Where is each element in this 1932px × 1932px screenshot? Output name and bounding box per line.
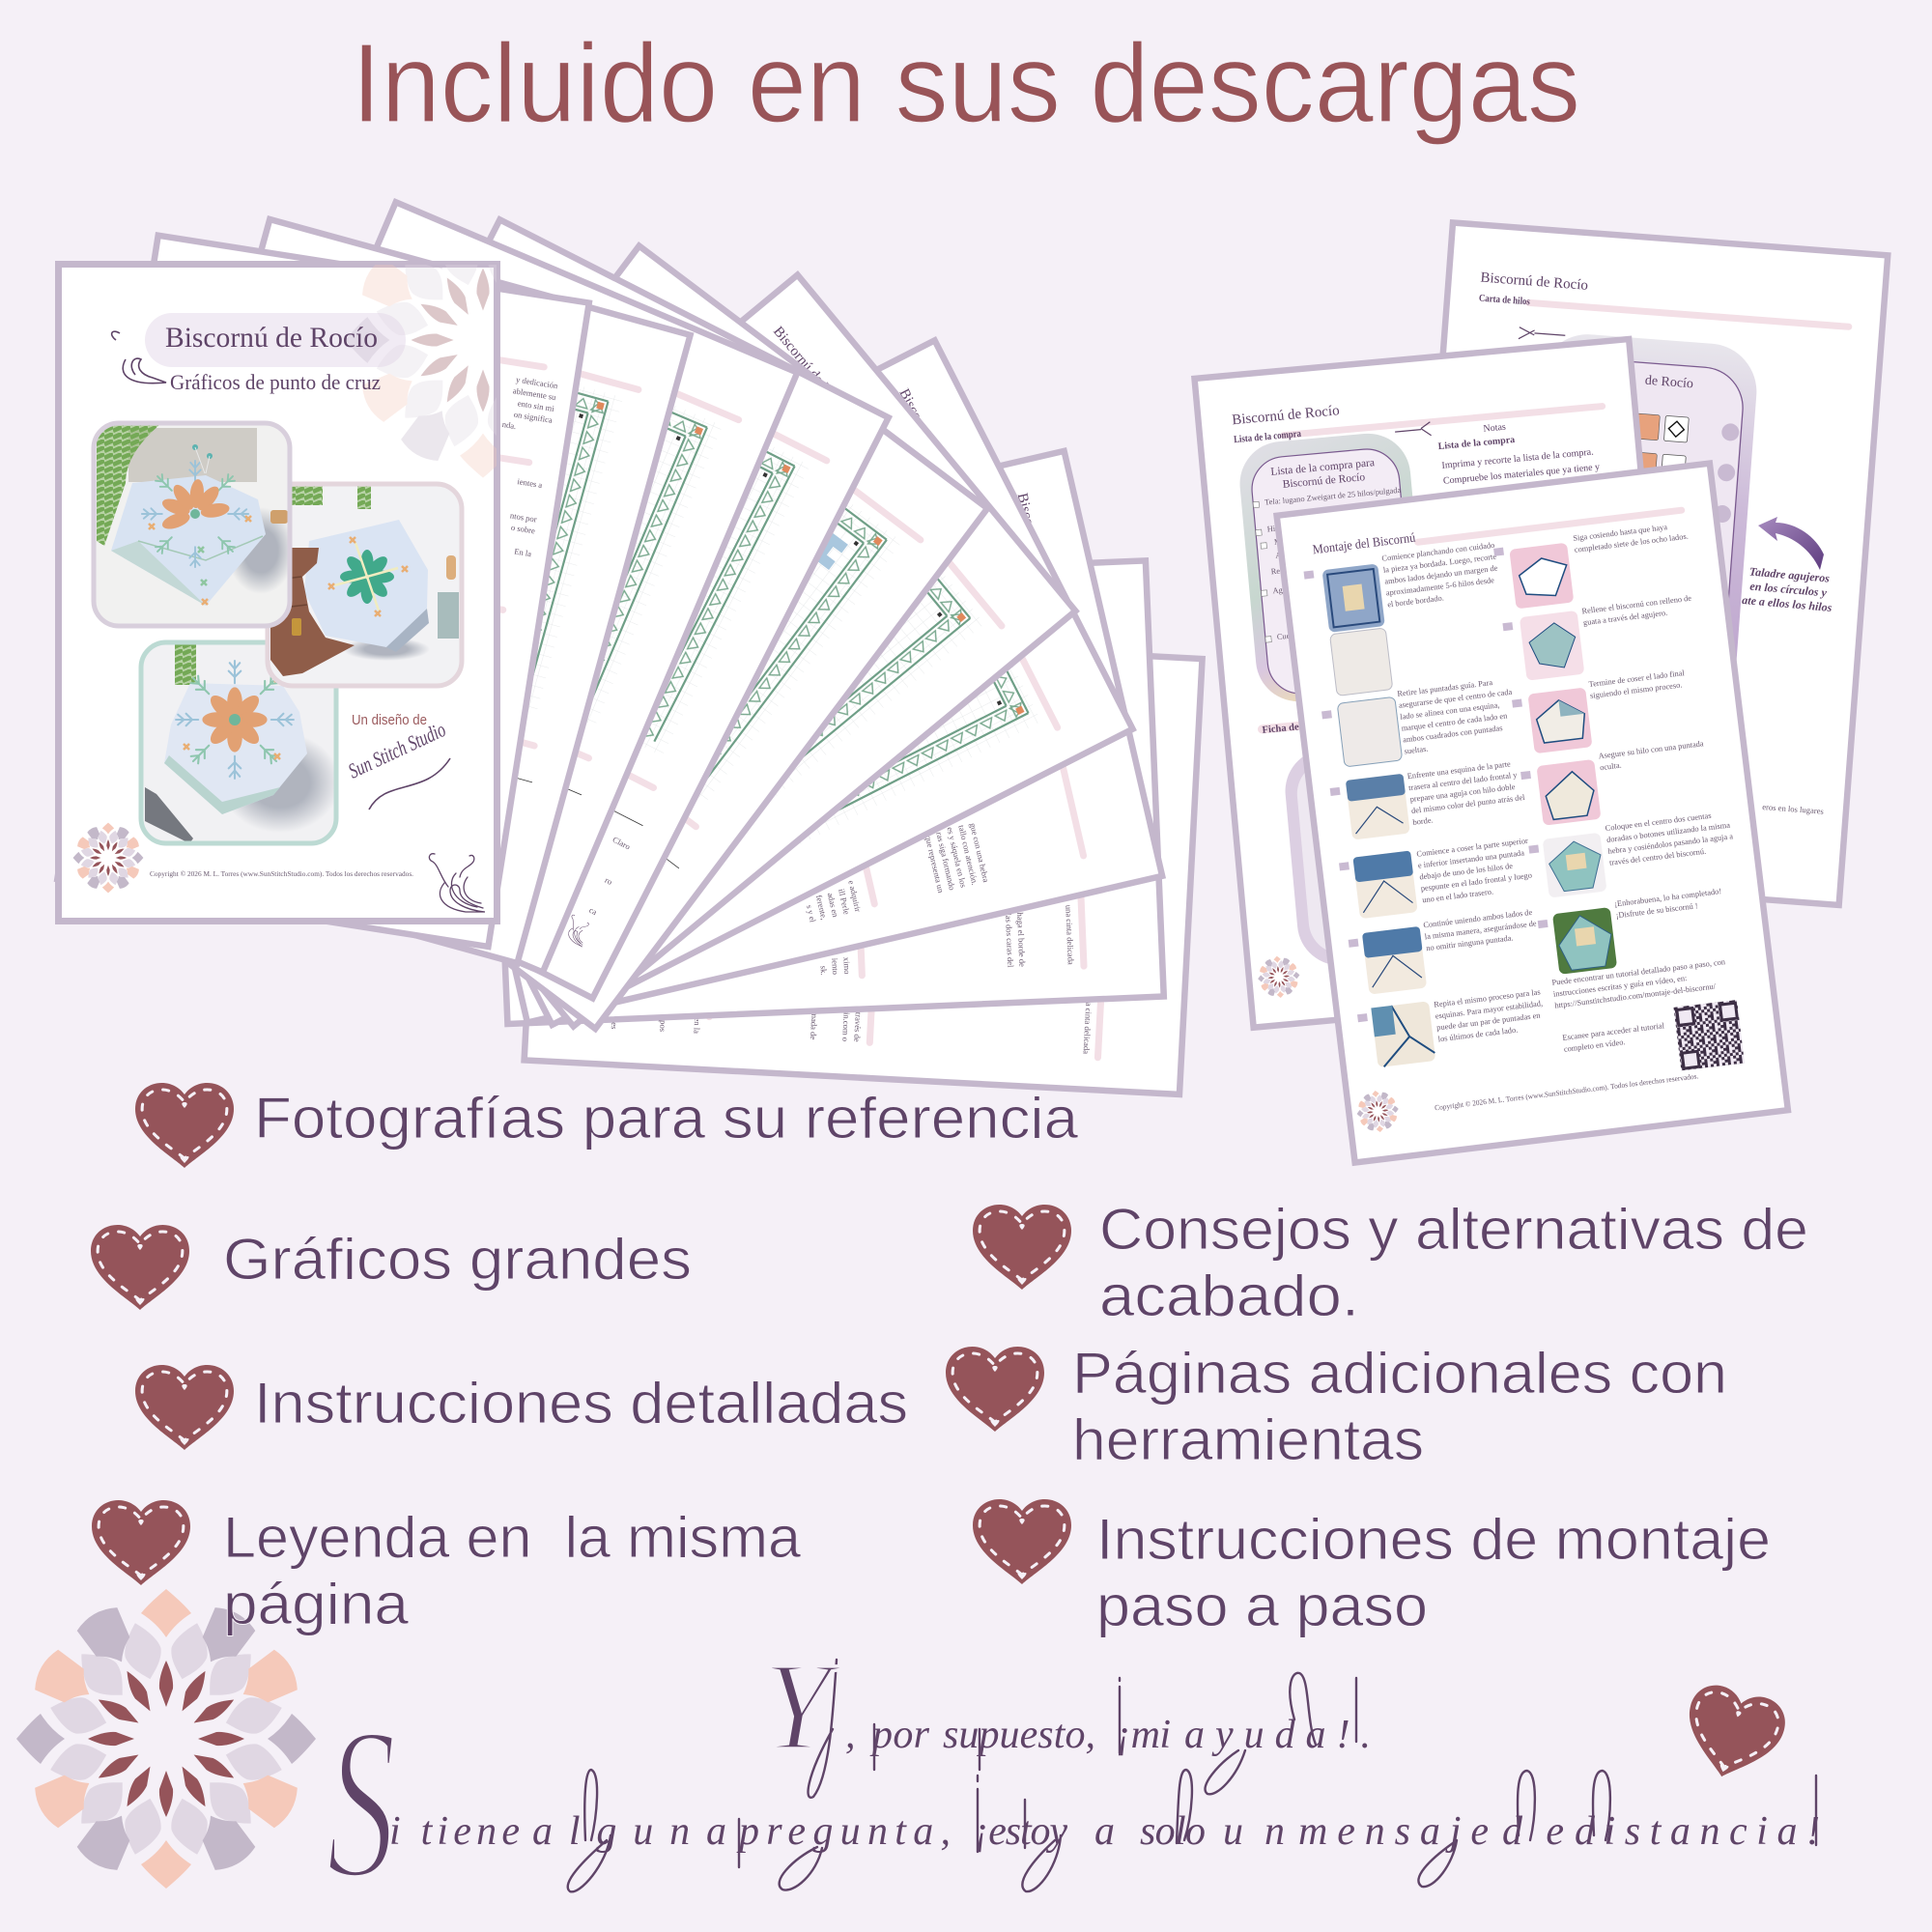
- page 4: chart page with legend and ornament: ro: [604, 875, 614, 887]
- heart bullet 7: [973, 1499, 1071, 1584]
- page 9: text page: ximo: [841, 957, 852, 975]
- signature: Sun Stitch Studio: [345, 717, 449, 783]
- step 2: lado se alinea con una esquina,: [1400, 700, 1500, 722]
- step 2: [1320, 676, 1519, 769]
- notes column: Notas: [1483, 422, 1506, 435]
- script line 2: solo: [1140, 1809, 1206, 1854]
- signature: [345, 717, 450, 810]
- script line 1: supuesto,: [943, 1713, 1095, 1757]
- title: Incluido en sus descargas: [352, 20, 1580, 146]
- shopping list card: Cuentas: [1276, 631, 1303, 641]
- shopping list card: Tela: lugano Zweigart de 25 hilos/pulgada: [1264, 486, 1402, 507]
- step 6: esquinas. Para mayor estabilidad,: [1435, 999, 1543, 1021]
- step 7: Siga cosiendo hasta que haya: [1573, 523, 1668, 543]
- step 11: doradas o botones utilizando la misma: [1606, 821, 1731, 844]
- heart bullet 6: [946, 1347, 1044, 1432]
- feature: legend on same page: página: [223, 1572, 410, 1636]
- pink divider: [1284, 407, 1603, 436]
- script line 2: distancia!: [1575, 1809, 1820, 1854]
- step 5: Continúe uniendo ambos lados de: [1423, 908, 1533, 929]
- step 10: oculta.: [1600, 761, 1622, 772]
- feature list: [91, 1083, 1808, 1638]
- step 9: siguiendo el mismo proceso.: [1590, 680, 1683, 700]
- feature: photographs: Fotografías para su referencia: [254, 1086, 1079, 1151]
- step 8: guata a través del agujero.: [1582, 609, 1668, 627]
- step 3: trasera al centro del lado frontal y: [1408, 771, 1519, 792]
- page 10: text page: epos: [658, 1016, 668, 1033]
- photo: biscornú with orange flower, upper: [94, 423, 295, 626]
- drill-hole note text: en los círculos y: [1749, 580, 1828, 600]
- step 6: puede dar un par de puntadas en: [1436, 1010, 1542, 1032]
- page 1: introduction text page: o sobre: [510, 523, 536, 535]
- script line 1: ,: [845, 1713, 856, 1757]
- shopping list card: Madejas: [1274, 535, 1302, 547]
- shopping list card: Rellenos: [1270, 565, 1299, 576]
- page 1: introduction text page: [57, 236, 589, 947]
- step 6: Repita el mismo proceso para las: [1434, 987, 1541, 1009]
- page 3: chart page: [141, 202, 797, 973]
- pink divider: [1418, 510, 1682, 542]
- sheet: assembly instructions: [1277, 464, 1788, 1162]
- shopping list card: Biscornú de Rocío: [1282, 471, 1366, 491]
- scissors: [1395, 422, 1432, 439]
- heading: Montaje del Biscornú: [1312, 530, 1416, 556]
- step 4: e inferior insertando una puntada: [1417, 848, 1525, 870]
- page 9: text page: haga el borde de: [1015, 912, 1027, 967]
- decorative mandala: [16, 1589, 316, 1889]
- step 6: [1356, 987, 1548, 1069]
- script line 2: mensaje: [1298, 1809, 1489, 1854]
- script line 2: i tiene: [389, 1809, 520, 1854]
- script line 1: ayuda!.: [1184, 1713, 1371, 1757]
- page 4: chart page with legend and ornament: [204, 219, 889, 998]
- page 8: text page: ferente,: [814, 894, 829, 921]
- page 1: introduction text page: y dedicación: [515, 375, 559, 390]
- step 1: Comience planchando con cuidado: [1381, 541, 1495, 563]
- step 4: debajo de uno de los hilos de: [1419, 862, 1514, 882]
- notes column: Compruebe los materiales que ya tiene y: [1442, 462, 1601, 487]
- script line 2: ¡estoy: [974, 1809, 1067, 1854]
- page 4: chart page with legend and ornament: Claro: [611, 835, 632, 851]
- page 1: introduction text page: o.: [486, 630, 494, 640]
- step 1: [1303, 541, 1511, 698]
- page 8: text page: e adquirir: [846, 879, 864, 913]
- feature: additional tool pages: herramientas: [1072, 1407, 1424, 1472]
- thread card panel: [1513, 331, 1760, 752]
- script line 2: de: [1502, 1809, 1564, 1854]
- page 10: text page: una cinta delicada: [1082, 994, 1094, 1055]
- notes column: Lista de la compra: [1437, 435, 1516, 452]
- page 1: introduction text page: ntos por: [509, 510, 538, 525]
- feature: step-by-step assembly: paso a paso: [1096, 1574, 1428, 1638]
- feature: tips and finishing alternatives: acabado.: [1099, 1264, 1359, 1328]
- tutorial link text: Escanee para acceder al tutorial: [1562, 1021, 1665, 1042]
- step 4: pespunte en el lado frontal y luego: [1420, 871, 1532, 893]
- shopping list card: Hilos DMC: [1266, 522, 1306, 533]
- heart bullet 1: [135, 1083, 234, 1168]
- page 8: text page: es y sáquela en los: [945, 826, 969, 889]
- heart bullet 5: [973, 1205, 1071, 1290]
- cover title pill: [145, 313, 406, 367]
- step 4: uno en el lado trasero.: [1422, 887, 1493, 904]
- step 12: ¡Disfrute de su biscornú !: [1615, 901, 1698, 920]
- drill-hole note text: ate a ellos los hilos: [1742, 593, 1833, 614]
- cover page: [55, 261, 500, 924]
- step 3: del mismo color del punto atrás del: [1411, 793, 1526, 815]
- closing message: [327, 1637, 1820, 1923]
- tutorial link text: https://Sunstitchstudio.com/montaje-del-biscornu/: [1554, 981, 1717, 1010]
- script line 1: por: [869, 1713, 930, 1757]
- shopping list card: Agujas: [1272, 584, 1296, 595]
- page ornament: [1726, 840, 1764, 879]
- step 1: la pieza ya bordada. Luego, recorte: [1382, 553, 1497, 575]
- step 2: sueltas.: [1404, 745, 1429, 755]
- fan of chart and instruction pages: [57, 202, 1203, 1094]
- step 12: ¡Enhorabuena, lo ha completado!: [1614, 887, 1722, 908]
- heart accent: [1675, 1680, 1791, 1789]
- step 5: [1347, 907, 1543, 996]
- project card: [1282, 738, 1464, 969]
- step 3: [1329, 758, 1528, 842]
- step 11: Coloque en el centro dos cuentas: [1605, 811, 1712, 833]
- step 7: [1492, 521, 1694, 611]
- script line 2: un: [1223, 1809, 1285, 1854]
- subheading: Lista de la compra: [1234, 429, 1302, 445]
- cover title: Biscornú de Rocío: [165, 322, 378, 354]
- heart bullet 4: [92, 1500, 190, 1585]
- cover flourish: [112, 331, 166, 384]
- page 8: text page: adas en: [826, 892, 840, 919]
- page 1: introduction text page: ientes a: [517, 476, 543, 490]
- page 8: text page: ill Perle: [837, 888, 852, 916]
- feature: detailed instructions: Instrucciones detalladas: [254, 1371, 908, 1435]
- page 8: text page: s y el: [805, 904, 818, 923]
- sheet: thread card: [1404, 222, 1888, 905]
- heading: Biscornú de Rocío: [1480, 270, 1588, 294]
- page 6: chart page: [296, 275, 1075, 1026]
- heart bullet 2: [91, 1225, 189, 1310]
- page 10: text page: [525, 625, 1203, 1094]
- shopping list card: Aguja: [1275, 550, 1295, 560]
- page 10: text page: in.com o: [840, 1012, 852, 1041]
- page 7: chart page: Biscornú de Rocío: [895, 386, 958, 490]
- page 9: text page: iento: [830, 958, 840, 975]
- script line 2: S: [327, 1682, 396, 1923]
- page 5: chart page: [247, 246, 987, 1029]
- sheet: shopping list: [1195, 339, 1688, 1028]
- cover spiral ornament: [429, 854, 485, 912]
- step 2: Retire las puntadas guía. Para: [1397, 678, 1493, 698]
- page 1: introduction text page: o: [487, 641, 492, 652]
- step 9: Termine de coser el lado final: [1588, 668, 1686, 689]
- step 3: prepare una aguja con hilo doble: [1409, 782, 1516, 804]
- thread card panel: de Rocío: [1644, 374, 1693, 391]
- step 9: [1511, 668, 1692, 755]
- page 1: introduction text page: nda.: [501, 419, 517, 431]
- tutorial link text: Puede encontrar un tutorial detallado paso a paso, con: [1551, 957, 1726, 987]
- step 10: [1520, 739, 1711, 828]
- page 8: text page: lo que representa un: [922, 826, 946, 895]
- step 11: [1527, 809, 1738, 899]
- step 8: Rellene el biscornú con relleno de: [1581, 594, 1692, 615]
- step 3: Enfrente una esquina de la parte: [1406, 759, 1511, 781]
- page 9: text page: sk.: [819, 965, 829, 976]
- lower panel heading: Ficha de proyecto: [1262, 719, 1339, 736]
- feature: tips and finishing alternatives: Consejos y alternativas de: [1099, 1197, 1808, 1262]
- scissors: [1519, 327, 1566, 342]
- step 1: el borde bordado.: [1387, 593, 1444, 609]
- step 1: ambos lados dejando un margen de: [1384, 564, 1498, 586]
- cover watermark mandala: [346, 265, 497, 477]
- script line 1: ¡mi: [1116, 1713, 1171, 1757]
- step 2: ambos cuadrados con puntadas: [1403, 724, 1503, 745]
- notes column: Imprima y recorte la lista de la compra.: [1441, 447, 1594, 471]
- step 2: asegurarse de que el centro de cada: [1398, 688, 1513, 710]
- step 5: la misma manera, asegurándose de: [1424, 919, 1537, 941]
- page 8: text page: Biscornú de Rocío: [1014, 492, 1053, 600]
- page 9: text page: una cinta delicada: [1064, 905, 1076, 965]
- page 9: text page: las dos caras del: [1004, 913, 1015, 968]
- page 10: text page: en la: [692, 1017, 702, 1034]
- photo: biscornú with green flower held in hand: [268, 484, 462, 686]
- heart bullet 3: [135, 1365, 234, 1450]
- page 6: chart page: Biscornú de Rocío: [770, 324, 851, 416]
- tutorial link text: instrucciones escritas y guía en vídeo, en:: [1552, 974, 1688, 999]
- page 2: chart page: [97, 219, 691, 963]
- cover subtitle: Gráficos de punto de cruz: [170, 370, 381, 394]
- script line 1: Y: [763, 1637, 841, 1776]
- page 1: introduction text page: la: [488, 618, 496, 629]
- step 10: Asegure su hilo con una puntada: [1598, 739, 1704, 760]
- QR code: [1674, 1000, 1745, 1070]
- feature: legend on same page: Leyenda en la misma: [223, 1505, 802, 1570]
- step 5: no omitir ninguna puntada.: [1426, 933, 1514, 952]
- step 12: [1536, 887, 1729, 977]
- step 4: [1339, 837, 1535, 921]
- step 2: marque el centro de cada lado en: [1401, 711, 1509, 733]
- step 8: [1502, 594, 1699, 683]
- shopping list card: [1236, 430, 1430, 705]
- script line 2: a: [1094, 1809, 1115, 1854]
- page 1: introduction text page: on significa: [513, 410, 554, 425]
- step 3: borde.: [1412, 815, 1434, 827]
- feature: step-by-step assembly: Instrucciones de montaje: [1096, 1507, 1771, 1572]
- feature: additional tool pages: Páginas adicionales con: [1072, 1341, 1727, 1406]
- subheading: Carta de hilos: [1479, 293, 1530, 307]
- note fragment: eros en los lugares: [1762, 802, 1825, 816]
- drill-hole note text: Taladre agujeros: [1748, 564, 1831, 585]
- step 7: completado siete de los ocho lados.: [1574, 532, 1689, 554]
- page 10: text page: través de: [852, 1012, 864, 1042]
- drill-hole note arrow: [1758, 517, 1824, 570]
- page 8: text page: ras siga formando: [934, 831, 957, 891]
- script line 2: pregunta,: [736, 1809, 951, 1854]
- feature: large charts: Gráficos grandes: [223, 1227, 692, 1292]
- step 6: los últimos de cada lado.: [1437, 1025, 1519, 1043]
- page 1: introduction text page: En la: [514, 547, 532, 558]
- step 4: Comience a coser la parte superior: [1416, 837, 1528, 859]
- page 8: text page: gue con una hebra: [968, 822, 991, 883]
- page 1: introduction text page: ento sin mi: [517, 398, 555, 413]
- page 10: text page: ales: [610, 1016, 620, 1030]
- sheet logo: [1256, 954, 1301, 1000]
- page 8: text page: tallo con atención.: [956, 824, 980, 886]
- cover logo mandala: [73, 823, 143, 893]
- page 5: chart page: Biscornú de Rocío: [626, 298, 722, 375]
- sheet logo: [1354, 1088, 1401, 1135]
- page 4: chart page with legend and ornament: ca: [587, 905, 599, 917]
- designer credit: Un diseño de: [352, 713, 427, 728]
- page 7: chart page: [355, 340, 1133, 1025]
- cover copyright: Copyright © 2026 M. L. Torres (www.SunStitchStudio.com). Todos los derechos reservados.: [150, 869, 413, 878]
- shopping list card: Lista de la compra para: [1270, 457, 1375, 478]
- page 10: text page: amada de: [809, 1008, 820, 1040]
- copyright: Copyright © 2026 M. L. Torres (www.SunStitchStudio.com). Todos los derechos reservados.: [1435, 1071, 1699, 1112]
- pink divider: [1529, 302, 1849, 327]
- photo: biscornú with orange flower, lower: [141, 642, 340, 843]
- heading: Biscornú de Rocío: [1232, 403, 1340, 428]
- page 9: text page: [490, 560, 1164, 1024]
- step 11: través del centro del biscornú.: [1609, 847, 1707, 867]
- step 1: aproximadamente 5-6 hilos desde: [1385, 576, 1495, 598]
- step 11: hebra y cosiéndolos pasando la aguja a: [1607, 832, 1734, 856]
- page 8: text page: [429, 451, 1162, 1023]
- page 1: introduction text page: ablemente su: [512, 385, 557, 402]
- tutorial link text: completo en vídeo.: [1563, 1037, 1626, 1054]
- script line 2: alguna: [532, 1809, 726, 1854]
